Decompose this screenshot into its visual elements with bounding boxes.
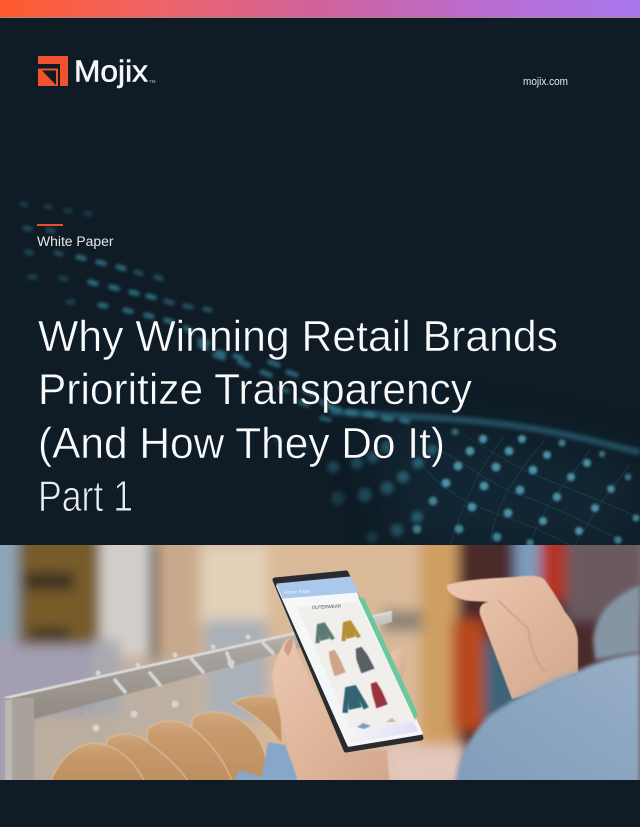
green strip <box>358 597 418 720</box>
subtitle: Part 1: Part 1 <box>38 472 133 521</box>
screen header <box>277 577 358 598</box>
clothes rack <box>5 612 392 782</box>
logo: Mojix <box>38 54 149 88</box>
wooden hangers <box>50 696 282 784</box>
smartphone: Home Page <box>284 589 311 596</box>
top gradient bar <box>0 0 640 18</box>
title: (And How They Do It) <box>38 419 445 468</box>
dotted mesh wave background <box>22 204 640 547</box>
thumbnail <box>284 639 293 656</box>
blurred hood <box>593 585 640 660</box>
accent line <box>37 224 63 226</box>
pointing right hand <box>447 576 578 699</box>
jackets <box>311 619 396 729</box>
product heading: OUTERWEAR <box>312 603 342 610</box>
left hand <box>272 620 405 784</box>
product card <box>297 602 417 728</box>
title: Why Winning Retail Brands <box>38 312 558 361</box>
title <box>38 312 558 468</box>
wordmark: Mojix <box>74 54 149 88</box>
website link: mojix.com <box>523 76 568 88</box>
photo: shopper using phone by clothes rack <box>0 545 640 780</box>
blurred store background <box>0 545 640 780</box>
phone screen <box>278 579 421 745</box>
label: White Paper: White Paper <box>37 234 114 249</box>
title: Prioritize Transparency <box>38 365 472 414</box>
trademark: TM <box>149 79 156 84</box>
smartphone <box>275 573 421 750</box>
blurred sweater sleeve <box>456 653 640 784</box>
shirt under hangers <box>234 742 298 780</box>
icon: Mojix square mark <box>38 56 68 86</box>
